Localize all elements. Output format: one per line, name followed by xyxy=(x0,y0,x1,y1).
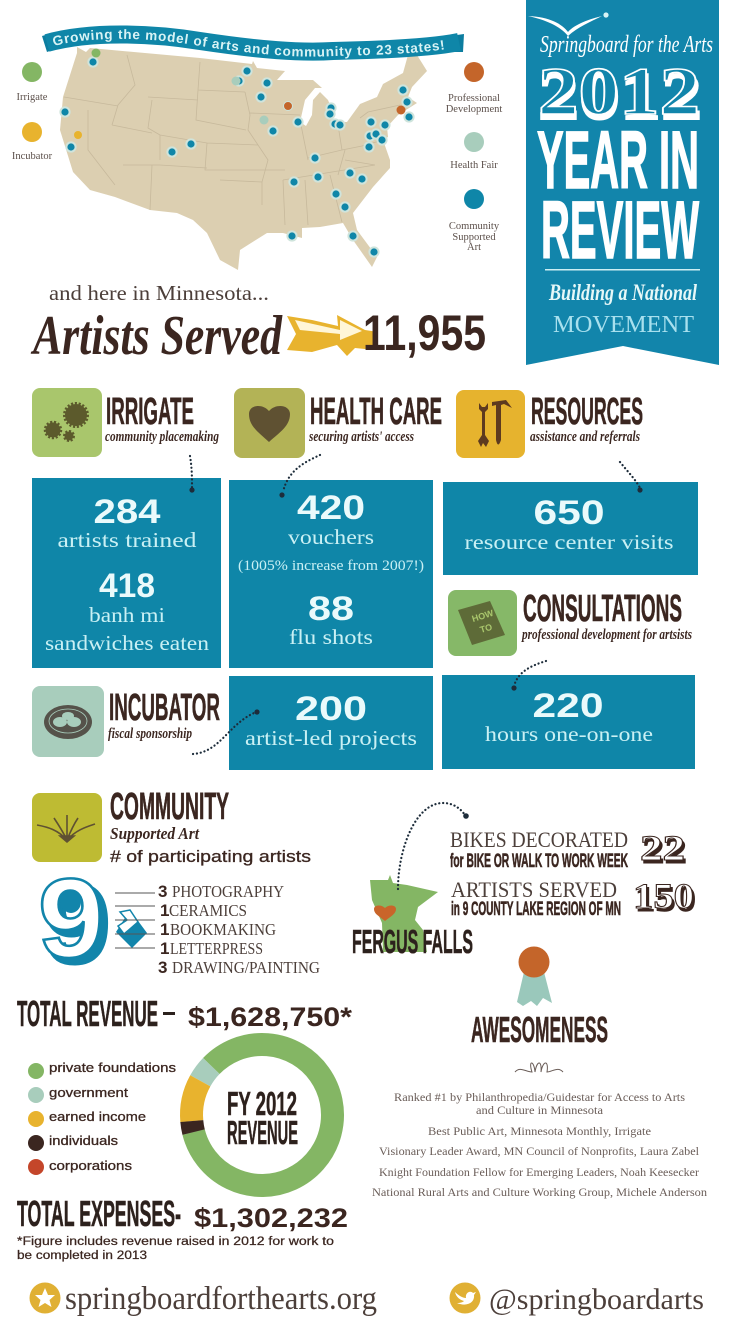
panel: community header xyxy=(32,786,311,866)
panel: incubator stats: artist-led projects xyxy=(245,726,417,750)
revenue donut chart xyxy=(192,1044,332,1185)
panel: irrigate stats: 418 xyxy=(99,567,155,605)
arrow: consultations xyxy=(511,661,546,691)
revenue legend: corporations xyxy=(49,1158,133,1173)
revenue legend: earned income xyxy=(49,1109,146,1124)
panel: incubator stats xyxy=(229,676,433,770)
awards list xyxy=(372,1090,707,1199)
artist discipline list: 1 xyxy=(160,901,169,920)
revenue donut chart: REVENUE xyxy=(227,1114,298,1151)
panel: health care stats: 420 xyxy=(297,489,365,527)
panel: incubator stats: 200 xyxy=(295,690,367,728)
arrow: health care xyxy=(279,455,320,498)
revenue donut chart: FY 2012 xyxy=(227,1085,297,1122)
text: HEALTH CARE xyxy=(310,391,442,433)
US map xyxy=(60,47,427,270)
text: FERGUS FALLS xyxy=(352,923,473,960)
fergus falls map xyxy=(352,875,473,960)
revenue legend xyxy=(28,1060,177,1175)
total revenue: TOTAL REVENUE xyxy=(17,993,158,1034)
icon: bird xyxy=(455,1292,476,1305)
panel: irrigate stats: sandwiches eaten xyxy=(45,631,210,655)
panel: health care stats: (1005% increase from 2007!) xyxy=(238,558,424,574)
icon: nest xyxy=(44,705,92,739)
icon: tools xyxy=(478,400,512,447)
panel: consultations stats: 220 xyxy=(532,687,604,725)
map legend left: Irrigate xyxy=(17,92,48,103)
website: springboardforthearts.org xyxy=(65,1281,377,1317)
icon: award ribbon xyxy=(517,946,552,1006)
artist discipline list: 3 xyxy=(158,882,167,901)
panel: health care header: securing artists' access xyxy=(308,429,414,445)
panel: irrigate stats: 284 xyxy=(94,493,161,531)
artists served region: 150 xyxy=(635,879,696,919)
awards list: and Culture in Minnesota xyxy=(476,1103,604,1117)
icon: how-to book xyxy=(458,601,505,645)
panel: resources stats: 650 xyxy=(534,494,604,532)
icon: teal diamond book xyxy=(116,910,147,948)
map legend right: Art xyxy=(467,242,481,253)
panel: consultations stats: hours one-on-one xyxy=(485,722,653,746)
revenue legend: individuals xyxy=(49,1133,119,1148)
subtitle: Building a National xyxy=(548,280,697,305)
panel: health care header xyxy=(234,388,442,458)
map dots xyxy=(60,48,414,257)
icon: gears xyxy=(46,404,87,440)
artist discipline list: 3 xyxy=(158,958,167,977)
total revenue: $1,628,750* xyxy=(188,1002,353,1032)
icon: flower xyxy=(37,815,95,842)
artists served: 11,955 xyxy=(363,305,486,361)
icon: how-to book: HOW xyxy=(471,608,495,624)
panel: health care stats: vouchers xyxy=(288,525,374,549)
footnote: *Figure includes revenue raised in 2012 for work to xyxy=(17,1236,334,1248)
panel: irrigate stats xyxy=(32,478,221,668)
revenue legend: government xyxy=(49,1085,128,1100)
minnesota heading: and here in Minnesota... xyxy=(49,281,269,305)
panel: resources stats: resource center visits xyxy=(464,530,674,554)
artist discipline list: PHOTOGRAPHY xyxy=(172,882,284,901)
panel: incubator header: fiscal sponsorship xyxy=(108,726,192,742)
panel: health care stats: 88 xyxy=(308,590,354,628)
awards list: Best Public Art, Minnesota Monthly, Irrigate xyxy=(428,1124,651,1138)
artist discipline list: 1 xyxy=(160,920,169,939)
panel: irrigate header: IRRIGATE xyxy=(106,391,194,433)
2012: 2012 xyxy=(538,53,700,129)
panel: community header: Supported Art xyxy=(110,824,200,843)
awards list: Knight Foundation Fellow for Emerging Leaders, Noah Keesecker xyxy=(379,1165,699,1179)
panel: irrigate header xyxy=(32,388,219,457)
icon: arrows xyxy=(287,315,378,356)
panel: community header: # of participating artists xyxy=(110,847,311,866)
panel: resources header xyxy=(456,390,643,458)
panel: resources stats xyxy=(443,482,698,575)
awards list: Visionary Leader Award, MN Council of Nonprofits, Laura Zabel xyxy=(379,1144,700,1158)
icon: how-to book: TO xyxy=(479,622,493,635)
panel: health care stats: flu shots xyxy=(289,625,373,649)
revenue legend: private foundations xyxy=(49,1060,177,1075)
panel: consultations header xyxy=(448,588,692,656)
icon: heart xyxy=(374,905,396,921)
total expenses: $1,302,232 xyxy=(194,1203,348,1233)
arrow: irrigate xyxy=(189,456,195,493)
map legend right: Supported xyxy=(452,232,496,243)
panel: consultations stats xyxy=(442,675,695,769)
map legend left: Incubator xyxy=(12,151,53,162)
arrow: fergus falls xyxy=(398,803,469,889)
bikes decorated: 22 xyxy=(640,828,685,868)
panel: health care stats xyxy=(229,480,433,668)
bikes decorated: BIKES DECORATED xyxy=(450,827,628,852)
panel: irrigate stats: banh mi xyxy=(89,603,165,627)
map legend right: Health Fair xyxy=(450,160,498,171)
map legend right: Development xyxy=(446,104,502,115)
panel: irrigate header: community placemaking xyxy=(105,429,219,445)
total expenses: TOTAL EXPENSES- xyxy=(17,1193,181,1234)
icon: heart xyxy=(249,406,290,442)
title ribbon: MOVEMENT xyxy=(553,312,694,338)
awards list: Ranked #1 by Philanthropedia/Guidestar for Access to Arts xyxy=(394,1090,685,1104)
artists served region: ARTISTS SERVED xyxy=(451,877,617,902)
logo bird xyxy=(528,16,602,36)
flourish xyxy=(515,1063,563,1072)
text: INCUBATOR xyxy=(109,687,220,729)
map legend right: Community xyxy=(449,221,500,232)
map legend right: Professional xyxy=(448,93,500,104)
footnote: be completed in 2013 xyxy=(17,1250,147,1262)
bikes decorated xyxy=(450,827,687,872)
artists served region: 150 xyxy=(633,876,694,916)
panel: incubator header xyxy=(32,686,220,757)
2012: 2012 xyxy=(538,58,702,134)
panel: resources header: assistance and referrals xyxy=(530,429,640,445)
arrow: incubator xyxy=(193,709,260,754)
banner: growing the model: Growing the model of arts and community to 23 states! xyxy=(53,29,444,58)
artist discipline list: LETTERPRESS xyxy=(170,939,263,958)
artist discipline list: DRAWING/PAINTING xyxy=(172,958,320,977)
panel: community header: COMMUNITY xyxy=(110,786,229,828)
panel: irrigate stats: artists trained xyxy=(58,528,197,552)
twitter: @springboardarts xyxy=(489,1283,704,1316)
artist discipline list: CERAMICS xyxy=(169,901,247,920)
title ribbon xyxy=(526,0,719,365)
artist discipline list xyxy=(115,882,320,977)
big number 9: 9 xyxy=(38,856,104,981)
footnote xyxy=(17,1236,334,1262)
icon: star xyxy=(35,1288,55,1307)
arrow: resources xyxy=(620,462,643,493)
bikes decorated: 22 xyxy=(642,831,687,871)
artists served: Artists Served xyxy=(31,305,283,367)
map legend left xyxy=(12,62,53,162)
big number 9: 9 xyxy=(43,862,111,987)
artist discipline list: BOOKMAKING xyxy=(170,920,276,939)
artists served region xyxy=(451,876,696,920)
awards list: National Rural Arts and Culture Working Group, Michele Anderson xyxy=(372,1185,707,1199)
artist discipline list: 1 xyxy=(160,939,169,958)
map legend right xyxy=(446,62,502,253)
